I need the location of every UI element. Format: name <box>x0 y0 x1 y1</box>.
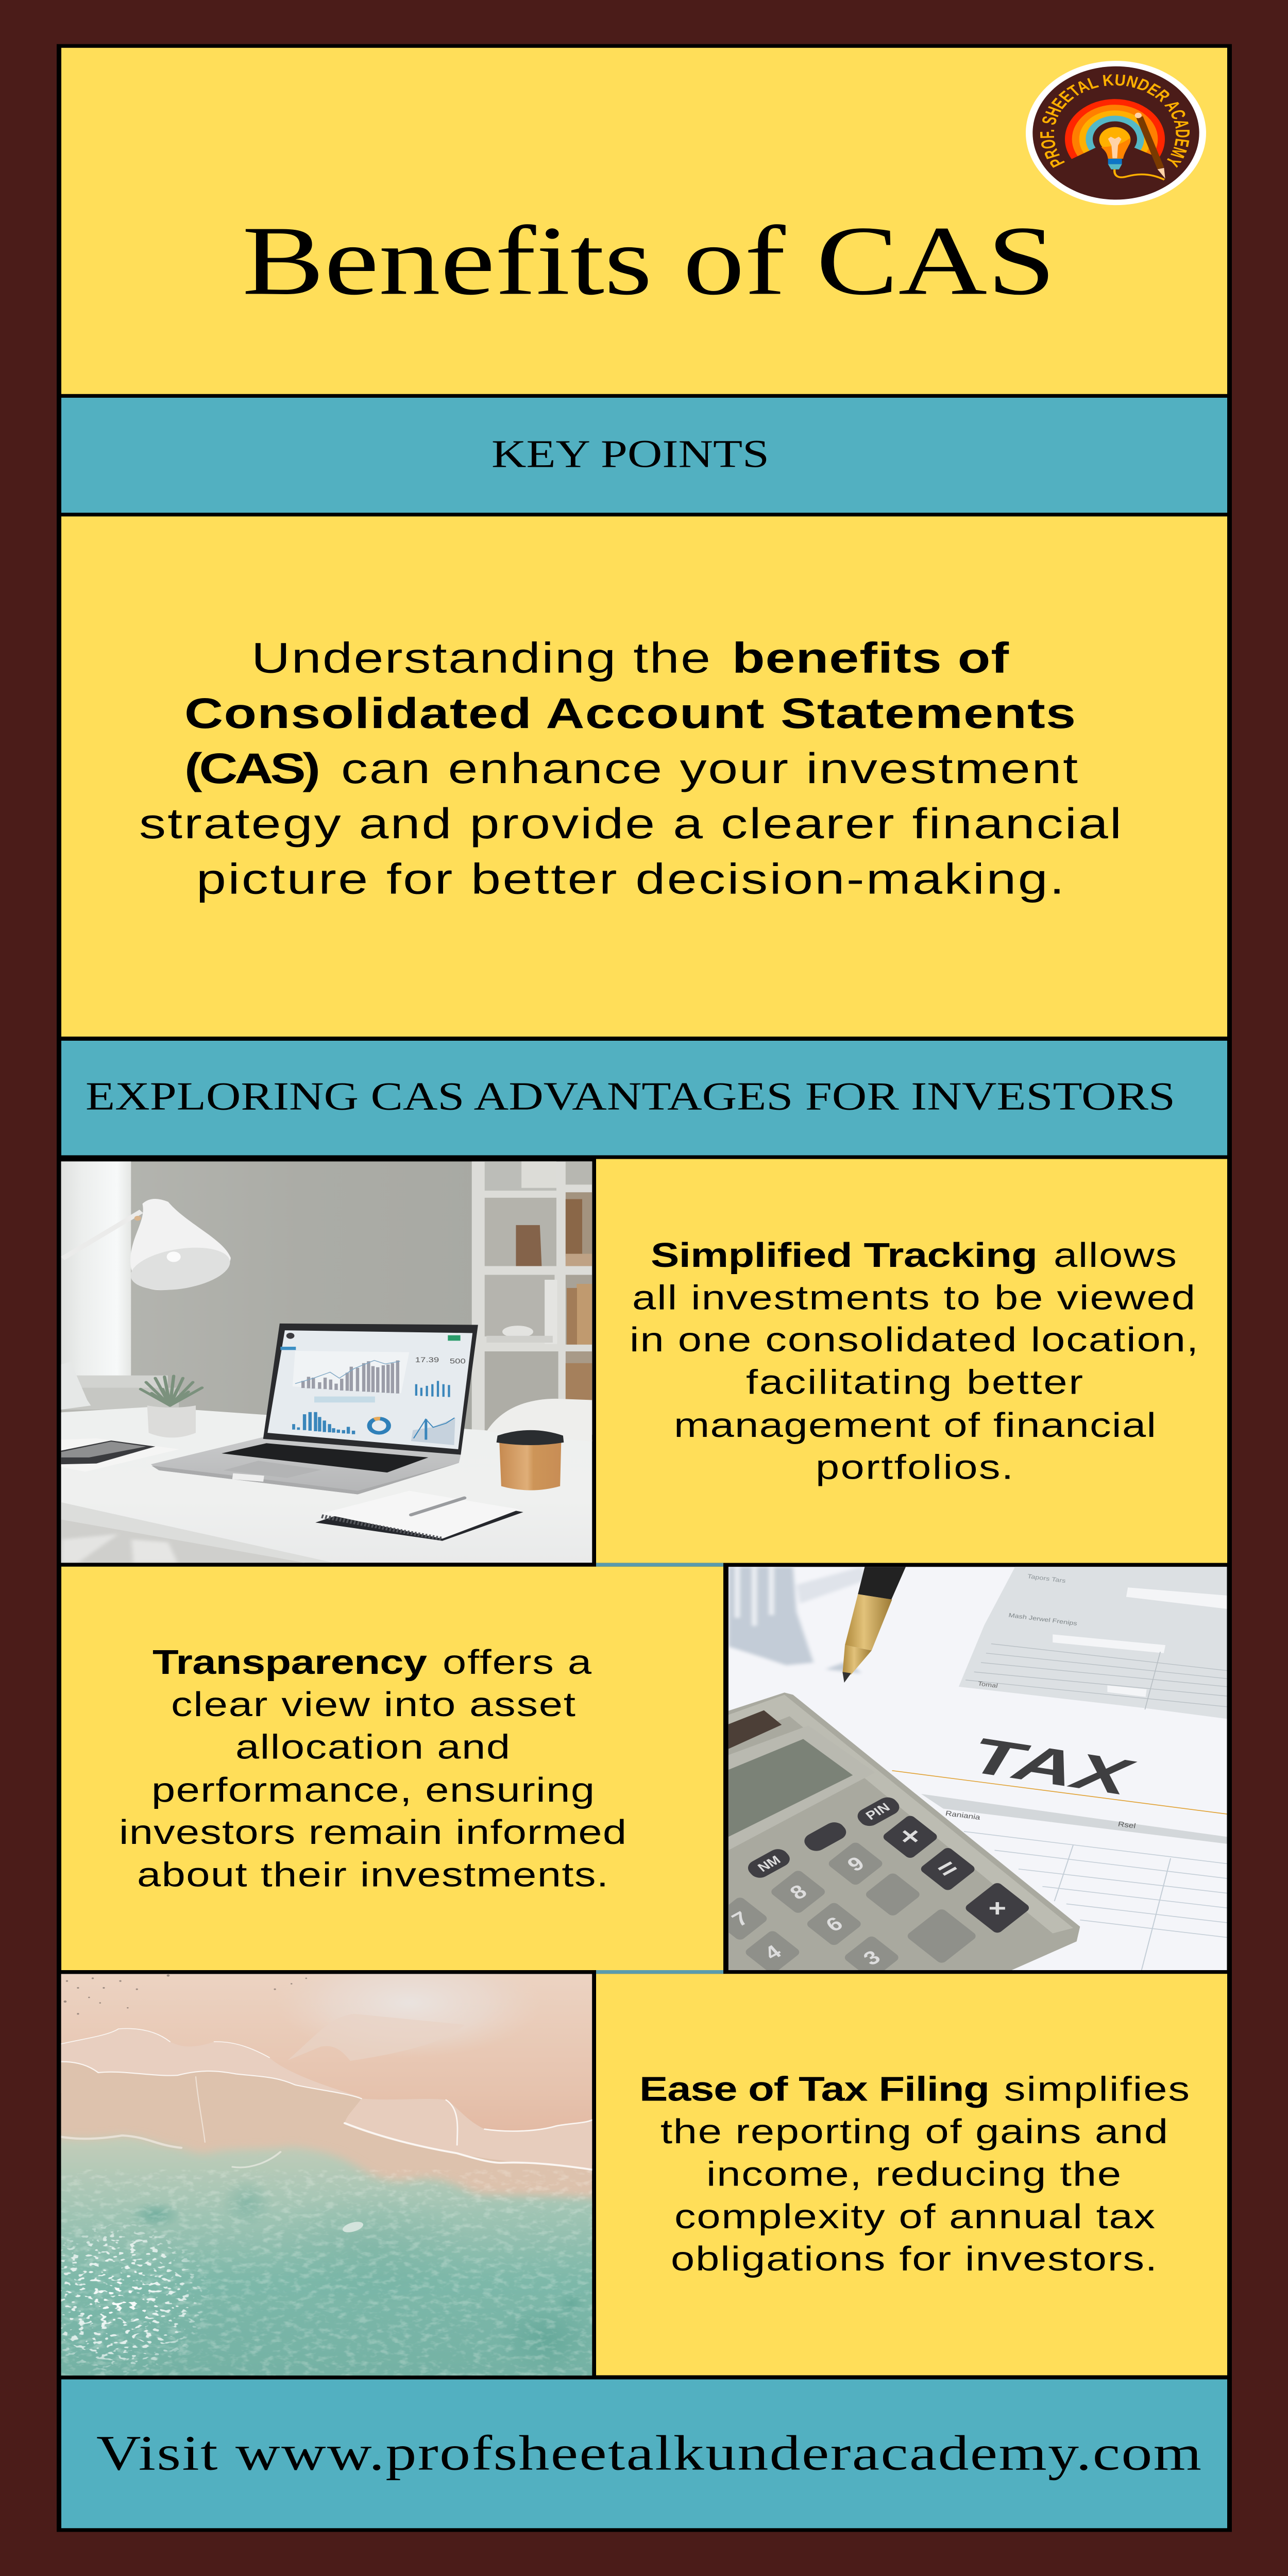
intro text: Consolidated Account Statements <box>184 689 1076 737</box>
intro text <box>139 634 1122 903</box>
key labels: 6 <box>821 1912 848 1936</box>
intro text: (CAS) <box>184 744 320 792</box>
key labels: 8 <box>785 1880 811 1904</box>
laptop screen <box>263 1324 478 1455</box>
panel: introduction <box>61 516 1227 1037</box>
lamp <box>62 1211 141 1259</box>
image: tax form and calculator: Tapors Tars <box>1027 1573 1066 1584</box>
key labels: = <box>930 1854 964 1884</box>
key labels: 9 <box>842 1852 869 1875</box>
divider strip <box>596 1970 723 1974</box>
water <box>41 2136 615 2399</box>
glitter <box>61 2224 216 2376</box>
foam lines <box>61 2028 592 2170</box>
text: ease of tax filing: income, reducing the <box>706 2155 1121 2193</box>
text: ease of tax filing: the reporting of gains and <box>660 2112 1168 2150</box>
intro text: can enhance your investment <box>341 744 1078 792</box>
plant <box>141 1376 202 1405</box>
wet sand band <box>61 2062 592 2208</box>
title: Benefits of CAS <box>242 206 1056 316</box>
text: transparency: clear view into asset <box>171 1685 575 1723</box>
table form <box>959 1567 1227 1719</box>
panel: key points banner <box>61 398 1227 513</box>
desk top <box>61 1407 592 1563</box>
key labels: + <box>988 1894 1006 1922</box>
chair back <box>486 1399 592 1442</box>
image: tax form and calculator: Mash Jerwel Frenips <box>1008 1612 1078 1627</box>
deep water patches <box>129 2201 181 2228</box>
image: laptop on desk <box>61 1161 593 1563</box>
text: simplified tracking: facilitating better <box>746 1363 1083 1401</box>
text: ease of tax filing: complexity of annual tax <box>674 2197 1155 2235</box>
key labels <box>727 1800 1006 1969</box>
notebook <box>315 1511 523 1541</box>
key labels: NM <box>755 1853 784 1874</box>
pebbles <box>64 1974 307 2014</box>
text: ease of tax filing: obligations for investors. <box>671 2240 1157 2278</box>
upper foam <box>61 2028 361 2097</box>
image: tax form and calculator: Raniania <box>945 1809 981 1822</box>
key labels: × <box>901 1823 919 1850</box>
logo: Prof. Sheetal Kunder Academy: PROF. SHEETAL KUNDER ACADEMY <box>1040 74 1190 168</box>
image: tax form and calculator <box>711 1567 1227 1980</box>
panel: title <box>61 48 1227 394</box>
text: transparency: investors remain informed <box>119 1813 626 1851</box>
key labels: 3 <box>858 1946 885 1969</box>
panel: website footer <box>61 2379 1227 2528</box>
laptop base <box>151 1437 461 1495</box>
panel: exploring banner <box>61 1041 1227 1155</box>
heading: exploring CAS advantages: EXPLORING CAS ADVANTAGES FOR INVESTORS <box>86 1074 1175 1118</box>
text: simplified tracking: portfolios. <box>816 1448 1013 1486</box>
text: ease of tax filing <box>639 2070 1190 2278</box>
image: tax form and calculator: Tomal <box>977 1680 998 1689</box>
key labels: 7 <box>727 1907 753 1930</box>
intro text: picture for better decision-making. <box>196 855 1064 903</box>
caustics <box>61 2170 592 2378</box>
TAX heading on paper: TAX <box>964 1726 1141 1806</box>
text: transparency: about their investments. <box>137 1856 608 1894</box>
intro text: benefits of <box>732 634 1009 682</box>
image: aerial beach <box>41 1948 615 2399</box>
table band <box>921 1794 1227 1844</box>
panel: simplified tracking <box>596 1159 1227 1563</box>
logo: Prof. Sheetal Kunder Academy <box>1026 61 1206 205</box>
text: simplified tracking: Simplified Tracking <box>651 1236 1038 1274</box>
key labels: PIN <box>862 1800 893 1822</box>
text: simplified tracking: in one consolidated location, <box>630 1320 1198 1359</box>
text: simplified tracking: all investments to be viewed <box>632 1279 1195 1317</box>
footer text: Visit www.profsheetalkunderacademy.com <box>96 2426 1201 2481</box>
text: transparency: allocation and <box>235 1728 510 1766</box>
pen <box>858 1567 906 1600</box>
intro text: strategy and provide a clearer financial <box>139 800 1122 848</box>
text: simplified tracking: management of financial <box>674 1406 1156 1444</box>
text: simplified tracking <box>630 1236 1198 1486</box>
text: transparency: offers a <box>443 1643 591 1681</box>
blurred chart <box>728 1567 868 1673</box>
text: simplified tracking: allows <box>1054 1236 1177 1274</box>
panel: transparency <box>61 1567 723 1970</box>
text: ease of tax filing: Ease of Tax Filing <box>639 2070 990 2108</box>
image: laptop on desk: 500 <box>450 1358 466 1365</box>
coffee cup <box>499 1443 561 1490</box>
heading: key points: KEY POINTS <box>492 432 769 476</box>
text: transparency: performance, ensuring <box>151 1771 595 1809</box>
calculator <box>728 1692 1080 1970</box>
divider strip <box>596 1563 723 1567</box>
panel: ease of tax filing <box>596 1974 1227 2375</box>
intro text: Understanding the <box>251 634 710 682</box>
text: transparency <box>119 1643 626 1894</box>
key labels: 4 <box>759 1941 786 1964</box>
image: tax form and calculator: Rsel <box>1117 1820 1137 1830</box>
text: ease of tax filing: simplifies <box>1004 2070 1190 2108</box>
image: laptop on desk: 17.39 <box>415 1356 439 1364</box>
text: transparency: Transparency <box>152 1643 427 1681</box>
calculator keys <box>711 1794 1031 1980</box>
